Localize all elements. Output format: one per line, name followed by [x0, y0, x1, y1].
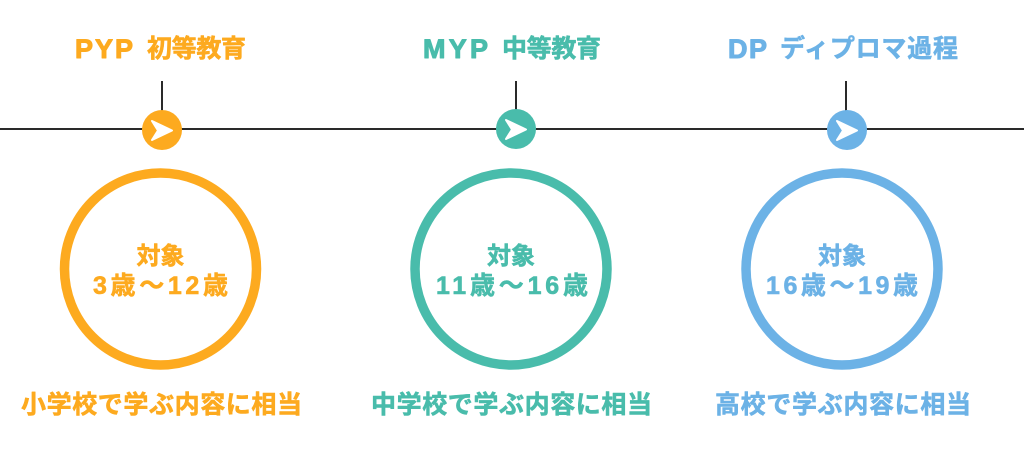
connector: DP	[845, 81, 847, 112]
age text: DP	[766, 243, 918, 300]
age text: MYP: 対象	[487, 243, 535, 270]
age text: MYP	[436, 243, 588, 300]
heading: DP: DP	[728, 34, 767, 64]
description: DP: 高校で学ぶ内容に相当	[715, 391, 971, 419]
age text: DP: 対象	[818, 243, 866, 270]
icon: PYP arrow marker	[142, 110, 182, 150]
heading: PYP	[75, 34, 246, 64]
icon: DP arrow marker	[827, 110, 867, 150]
age text: MYP: 11歳〜16歳	[436, 272, 588, 300]
timeline line	[0, 128, 1024, 130]
heading: MYP: MYP	[423, 34, 488, 64]
panel: DP	[715, 34, 971, 419]
description: MYP: 中学校で学ぶ内容に相当	[371, 391, 652, 419]
age text: PYP	[93, 243, 228, 300]
panel: PYP	[21, 34, 302, 419]
ring: DP	[746, 173, 938, 365]
age text: PYP: 対象	[136, 243, 184, 270]
heading: MYP	[423, 34, 601, 64]
connector: PYP	[161, 81, 163, 112]
age text: DP: 16歳〜19歳	[766, 272, 918, 300]
age text: PYP: 3歳〜12歳	[93, 272, 228, 300]
heading: PYP: 初等教育	[147, 35, 246, 63]
heading: PYP: PYP	[75, 34, 133, 64]
ring: MYP	[415, 173, 607, 365]
ring: PYP	[64, 173, 256, 365]
description: PYP: 小学校で学ぶ内容に相当	[21, 391, 302, 419]
connector: MYP	[515, 81, 517, 112]
heading: DP: ディプロマ過程	[780, 34, 958, 63]
panel: MYP	[371, 34, 652, 419]
heading: MYP: 中等教育	[502, 35, 601, 63]
icon: MYP arrow marker	[496, 109, 536, 149]
